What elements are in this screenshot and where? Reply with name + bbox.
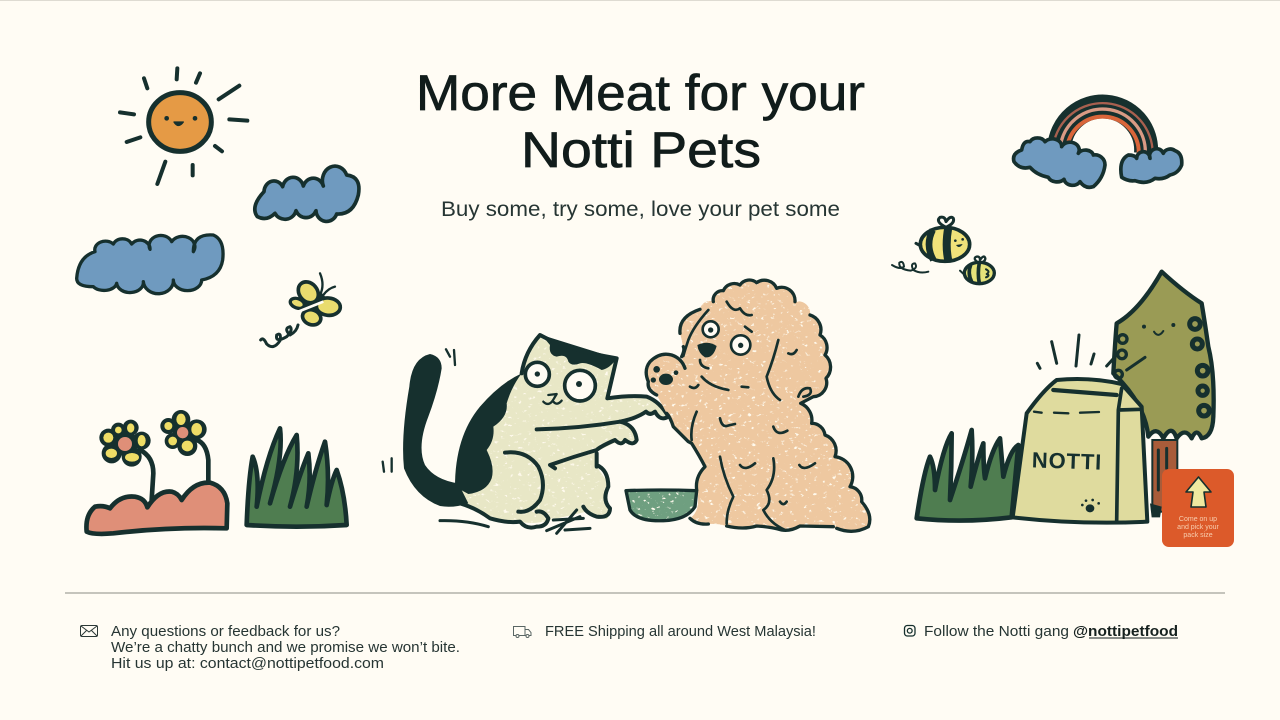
rainbow and bees: [892, 103, 1182, 284]
footer: social: [904, 624, 1178, 640]
icon: left grass: [247, 428, 347, 527]
icon: small cloud: [255, 166, 359, 221]
icon: rainbow left cloud: [1014, 138, 1105, 187]
flowers and left grass: [86, 410, 347, 534]
icon: delivery truck: [514, 626, 531, 638]
icon: rainbow right cloud: [1121, 149, 1182, 182]
icon: bee trail: [892, 262, 928, 273]
icon: envelope: [80, 626, 98, 636]
footer: contact: Hit us up at: contact@nottipetfood.com: [111, 656, 384, 672]
icon: rainbow: [1053, 103, 1153, 155]
footer: social: @nottipetfood: [1073, 624, 1178, 640]
dog: [646, 280, 870, 531]
title: Notti Pets: [521, 122, 761, 178]
callout: pick your pack size: [1162, 469, 1234, 547]
footer: contact: We’re a chatty bunch and we promise we won’t bite.: [111, 640, 460, 656]
footer: shipping: FREE Shipping all around West Malaysia!: [545, 624, 816, 640]
icon: burst lines: [1037, 335, 1094, 368]
cat: [383, 335, 668, 533]
callout: pick your pack size: pack size: [1183, 532, 1213, 539]
icon: small bee: [960, 257, 994, 284]
callout: pick your pack size: Come on up: [1179, 516, 1217, 523]
bowl: [626, 490, 697, 521]
icon: sun: [120, 68, 247, 184]
icon: right grass: [917, 430, 1018, 521]
footer: contact: Any questions or feedback for us?: [111, 624, 340, 640]
icon: flower mound: [86, 410, 227, 534]
icon: butterfly: [261, 273, 341, 347]
callout: pick your pack size: and pick your: [1177, 524, 1219, 531]
illustration: cat, dog and bowl: [383, 280, 870, 533]
icon: large cloud: [77, 235, 223, 294]
icon: Notti food bag: NOTTI: [1031, 447, 1102, 475]
icon: instagram: [904, 626, 915, 636]
subtitle: Buy some, try some, love your pet some: [441, 198, 840, 221]
icon: tree: [1107, 272, 1214, 517]
icon: Notti food bag: [1013, 379, 1147, 523]
tree, pet food bag and right grass: [917, 272, 1214, 523]
sun and left clouds with butterfly: [77, 68, 359, 347]
title: [416, 65, 865, 178]
title: More Meat for your: [416, 65, 865, 121]
footer: contact: [80, 624, 464, 672]
icon: big bee: [916, 217, 970, 261]
footer: social: Follow the Notti gang: [924, 624, 1069, 640]
